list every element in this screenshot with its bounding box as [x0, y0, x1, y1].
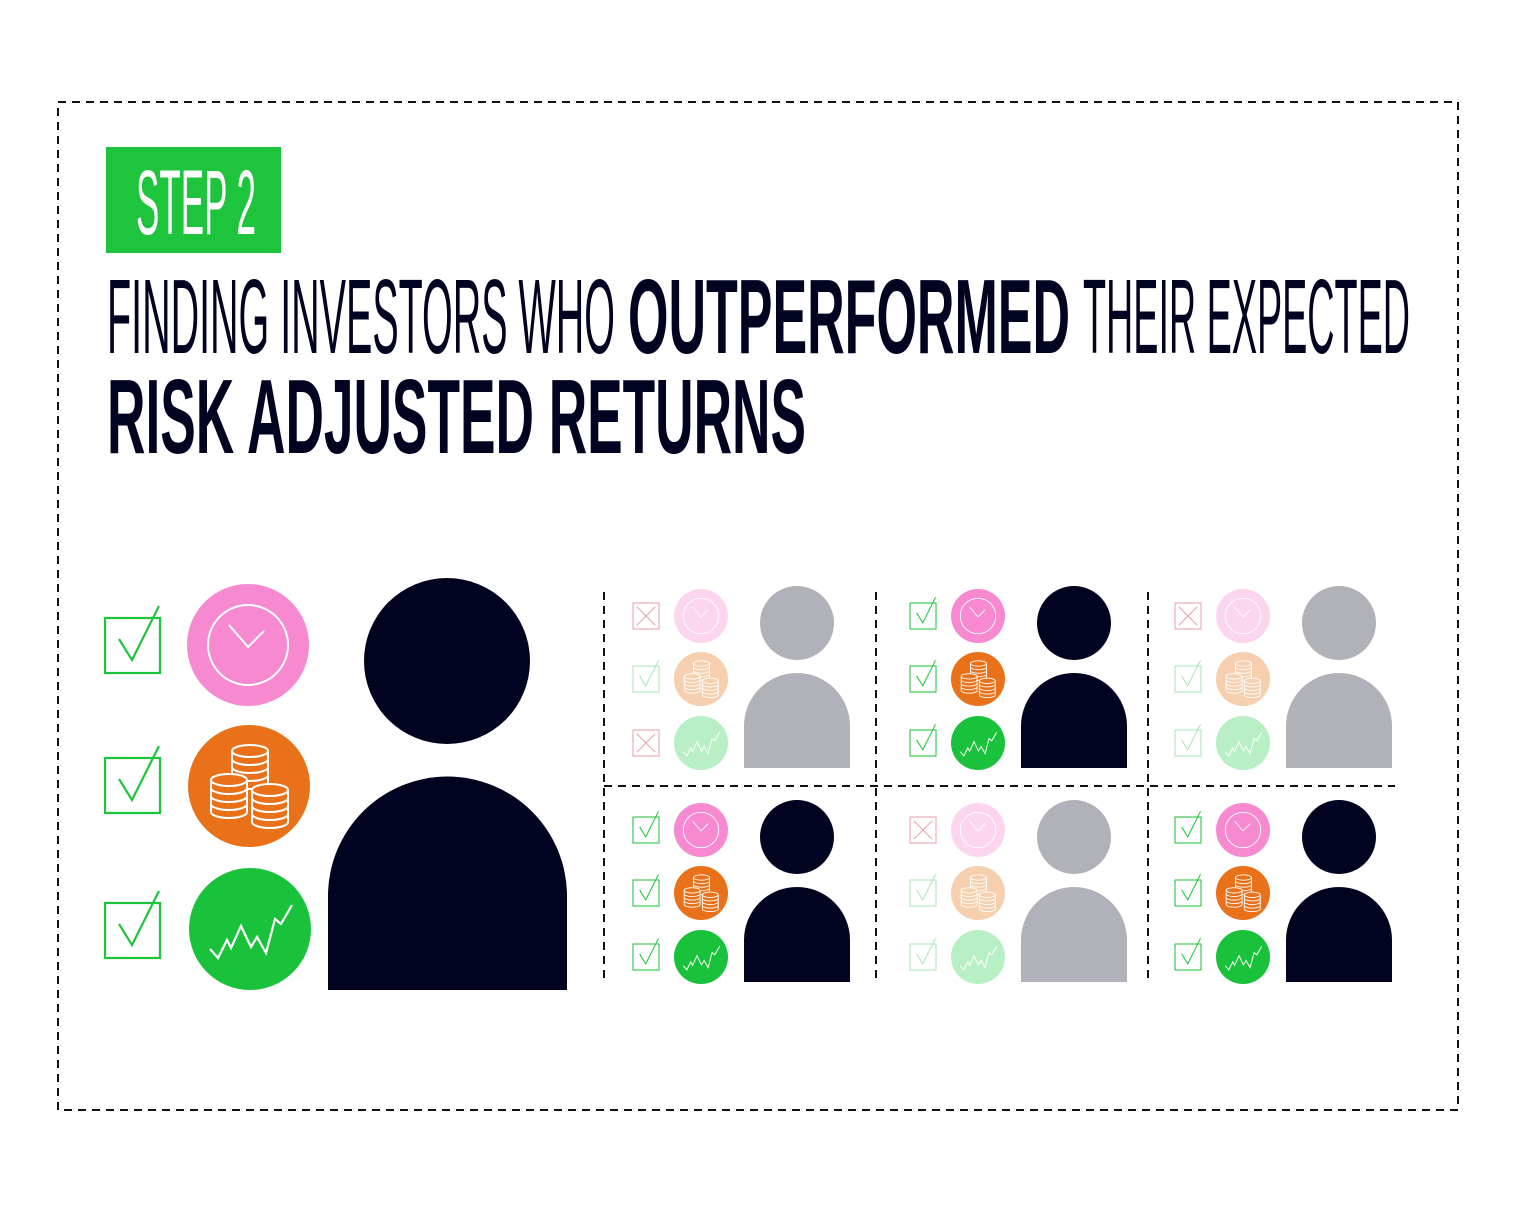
featured investor: [105, 578, 567, 990]
icon: coins: [188, 725, 310, 847]
investor: row2 col1 (selected): [633, 800, 850, 984]
investor: row1 col1 (not selected): [633, 586, 850, 770]
text: STEP 2: [136, 152, 256, 254]
investor grid: [633, 586, 1392, 984]
title: [107, 258, 1410, 476]
grid dividers: [604, 592, 1395, 982]
investor: row1 col2 (selected): [910, 586, 1127, 770]
investor: row2 col2 (not selected): [910, 800, 1127, 984]
step badge: [106, 147, 281, 254]
title: FINDING INVESTORS WHO: [107, 258, 615, 376]
person: [328, 578, 567, 990]
icon: clock: [187, 584, 309, 706]
criteria checklist: [105, 606, 160, 958]
icon: chart: [189, 868, 311, 990]
title: RISK ADJUSTED RETURNS: [107, 358, 806, 476]
title: OUTPERFORMED: [628, 258, 1070, 376]
outer dashed frame: [58, 102, 1458, 1110]
investor: row2 col3 (selected): [1175, 800, 1392, 984]
investor: row1 col3 (not selected): [1175, 586, 1392, 770]
